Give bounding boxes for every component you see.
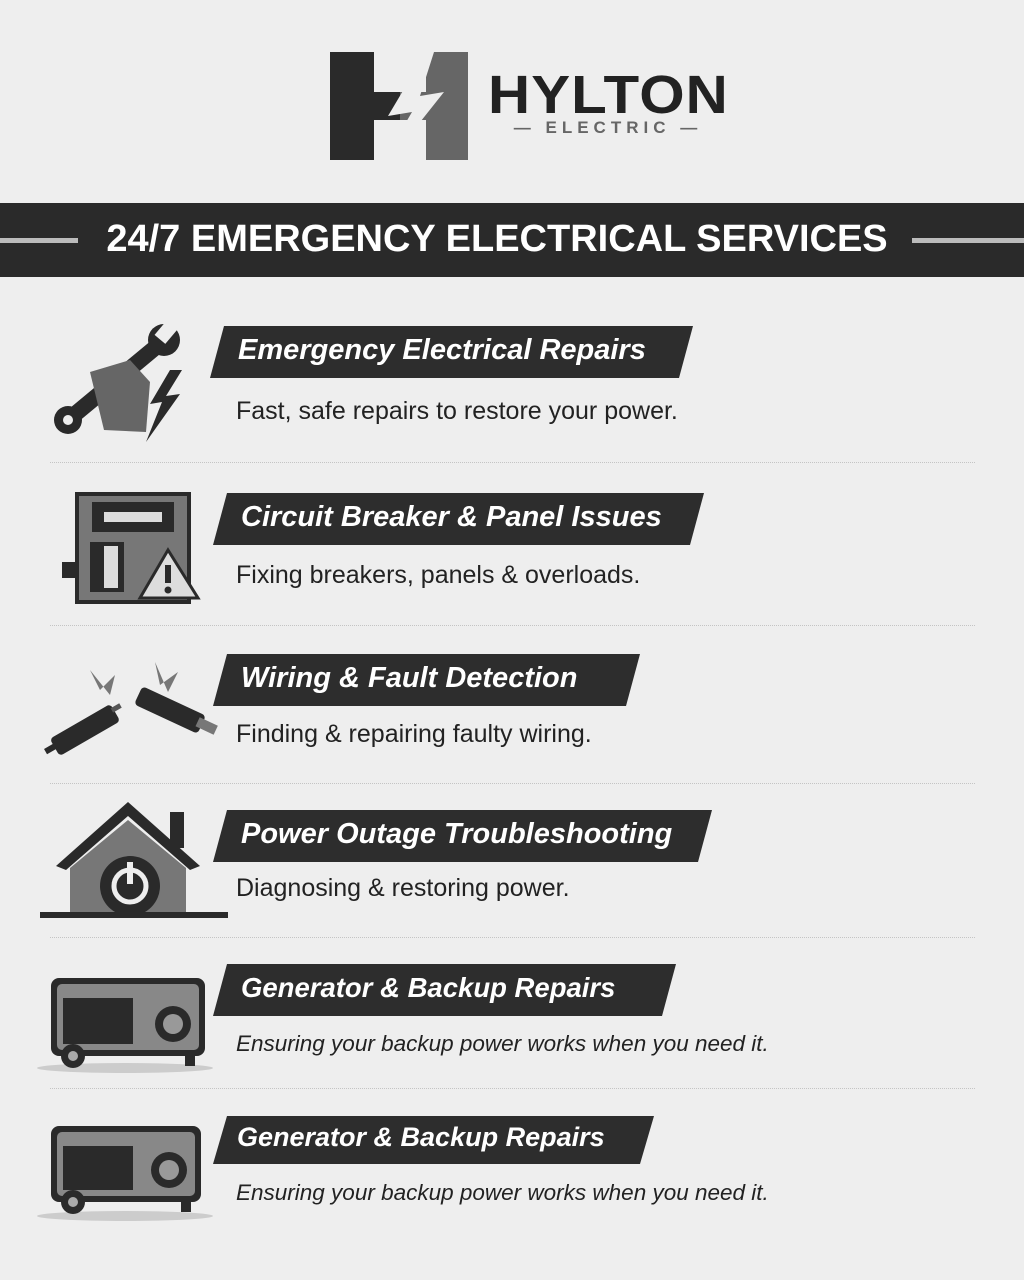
desc: Ensuring your backup power works when you need it. [236, 1031, 769, 1056]
tab: Wiring & Fault Detection [241, 662, 577, 694]
row 3 [44, 654, 640, 755]
icon: house power [40, 802, 228, 918]
tab [213, 493, 704, 545]
icon: generator [37, 978, 213, 1073]
logo mark [330, 52, 468, 160]
icon: generator [37, 1126, 213, 1221]
title banner [0, 203, 1024, 277]
desc: Fast, safe repairs to restore your power. [236, 397, 678, 425]
icon: broken wires [44, 662, 218, 755]
tab: Circuit Breaker & Panel Issues [241, 501, 662, 533]
row 4 [40, 802, 712, 918]
desc: Ensuring your backup power works when you need it. [236, 1180, 769, 1205]
tab [213, 654, 640, 706]
tab [210, 326, 693, 378]
title: 24/7 EMERGENCY ELECTRICAL SERVICES [106, 218, 888, 260]
tagline: — ELECTRIC — [514, 118, 702, 137]
desc: Diagnosing & restoring power. [236, 874, 570, 902]
tab: Generator & Backup Repairs [241, 972, 615, 1003]
row 5 [37, 964, 769, 1073]
row 2 [62, 492, 704, 604]
tab: Emergency Electrical Repairs [238, 334, 646, 366]
tab [213, 1116, 654, 1164]
tab: Generator & Backup Repairs [237, 1122, 605, 1152]
row 6 [37, 1116, 769, 1221]
tab: Power Outage Troubleshooting [241, 818, 672, 850]
row 1 [54, 324, 693, 442]
desc: Fixing breakers, panels & overloads. [236, 561, 640, 589]
brand name: HYLTON [488, 65, 729, 125]
desc: Finding & repairing faulty wiring. [236, 720, 592, 748]
tab [213, 964, 676, 1016]
logo [330, 52, 729, 160]
tab [213, 810, 712, 862]
icon: panel [62, 492, 201, 604]
icon: wrench fist [54, 324, 182, 442]
